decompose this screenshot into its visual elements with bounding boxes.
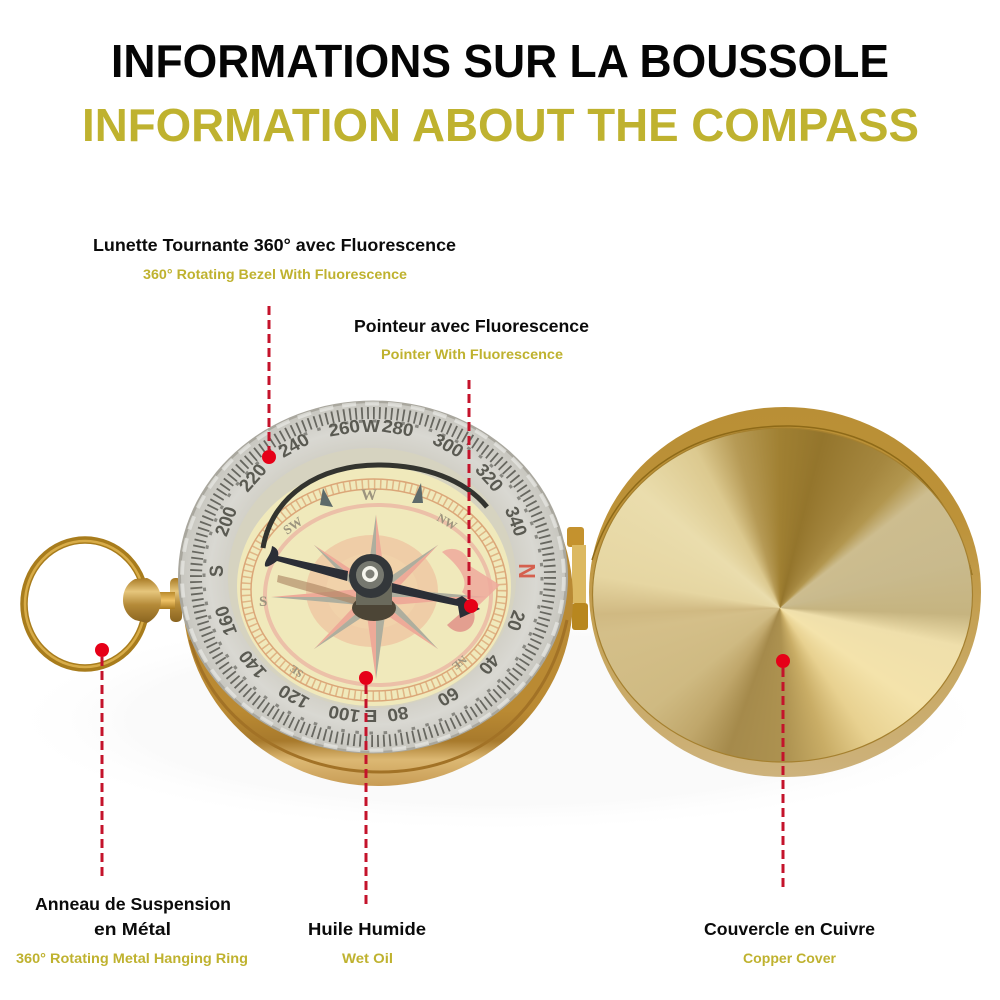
needle pivot — [349, 554, 396, 621]
label: wet oil: Huile Humide — [308, 919, 426, 939]
ghost needle smear — [277, 575, 362, 606]
compass rose — [271, 515, 488, 679]
panel: compass body — [178, 400, 573, 786]
ring knob — [123, 578, 182, 623]
label: hanging ring: en Métal — [94, 919, 171, 939]
label: hanging ring — [16, 894, 248, 966]
north fleur mark — [442, 549, 500, 606]
rotating bezel — [178, 400, 568, 754]
bezel numerals: N — [514, 563, 540, 579]
cardinal dial letters: SE — [288, 662, 306, 679]
cardinal dial letters — [259, 487, 469, 679]
bezel numerals: 160 — [210, 603, 241, 638]
cardinal dial letters: NE — [449, 653, 469, 672]
fluorescent dial — [228, 448, 516, 708]
bezel numerals: 120 — [275, 681, 313, 713]
label: rotating bezel: Lunette Tournante 360° avec Fluorescence — [93, 235, 456, 255]
icon: metal hanging ring — [24, 540, 182, 668]
bezel numerals: 260 — [327, 415, 362, 440]
label: rotating bezel: 360° Rotating Bezel With Fluorescence — [143, 267, 408, 282]
callout: ring leader — [95, 643, 109, 877]
bezel numerals: S — [205, 565, 227, 577]
bezel numerals: 80 — [386, 702, 410, 726]
cardinal dial letters: NW — [434, 510, 459, 533]
callout: rotating bezel leader — [262, 306, 276, 464]
title: French: INFORMATIONS SUR LA BOUSSOLE — [111, 35, 889, 87]
cardinal dial letters: W — [361, 487, 377, 504]
bezel numerals: 300 — [429, 429, 467, 461]
dial triangles — [320, 488, 333, 507]
bezel numerals: 320 — [471, 460, 508, 495]
lid brushed inner disc — [592, 428, 973, 762]
bezel numerals: W — [362, 415, 381, 436]
degree ticks — [196, 413, 550, 741]
bezel numerals: 340 — [501, 504, 532, 539]
label: wet oil: Wet Oil — [342, 951, 393, 966]
cardinal dial letters: S — [259, 594, 267, 610]
title: English: INFORMATION ABOUT THE COMPASS — [82, 99, 919, 151]
bezel numerals: 280 — [380, 415, 415, 440]
knurled edge — [182, 404, 564, 750]
rose medallion — [306, 535, 438, 647]
label: wet oil — [308, 919, 426, 966]
lid rim — [589, 407, 981, 777]
label: pointer: Pointeur avec Fluorescence — [354, 316, 589, 336]
panel: copper cover lid — [589, 407, 981, 777]
dark inner arc — [263, 465, 487, 548]
ring loop — [24, 540, 146, 668]
label: rotating bezel — [93, 235, 456, 282]
bezel numerals — [205, 415, 540, 727]
callout: cover leader — [776, 654, 790, 888]
label: copper cover: Couvercle en Cuivre — [704, 919, 875, 939]
callout: pointer leader — [464, 380, 478, 613]
bezel numerals: 20 — [503, 608, 530, 634]
bezel numerals: 220 — [234, 460, 271, 495]
label: pointer: Pointer With Fluorescence — [381, 347, 564, 362]
bezel numerals: E — [365, 706, 377, 727]
label: hanging ring: 360° Rotating Metal Hanging Ring — [16, 951, 248, 966]
bezel numerals: 60 — [434, 683, 463, 711]
bezel numerals: 100 — [327, 702, 362, 727]
bezel numerals: 200 — [210, 504, 241, 539]
callout: wet oil leader — [359, 671, 373, 906]
bezel numerals: 40 — [474, 650, 505, 679]
title — [82, 35, 919, 151]
bezel numerals: 240 — [275, 429, 313, 461]
brass case — [183, 410, 573, 786]
label: copper cover — [704, 919, 875, 966]
hinge — [567, 527, 588, 630]
cardinal dial letters: SW — [280, 514, 305, 537]
dial hatch ring — [246, 484, 502, 696]
bezel numerals: 140 — [234, 647, 271, 682]
soft shadow under compass — [20, 610, 980, 830]
dial pink ring — [265, 505, 491, 685]
label: pointer — [354, 316, 589, 362]
pointer needle — [265, 546, 480, 618]
label: hanging ring: Anneau de Suspension — [35, 894, 231, 914]
label: copper cover: Copper Cover — [743, 951, 837, 966]
